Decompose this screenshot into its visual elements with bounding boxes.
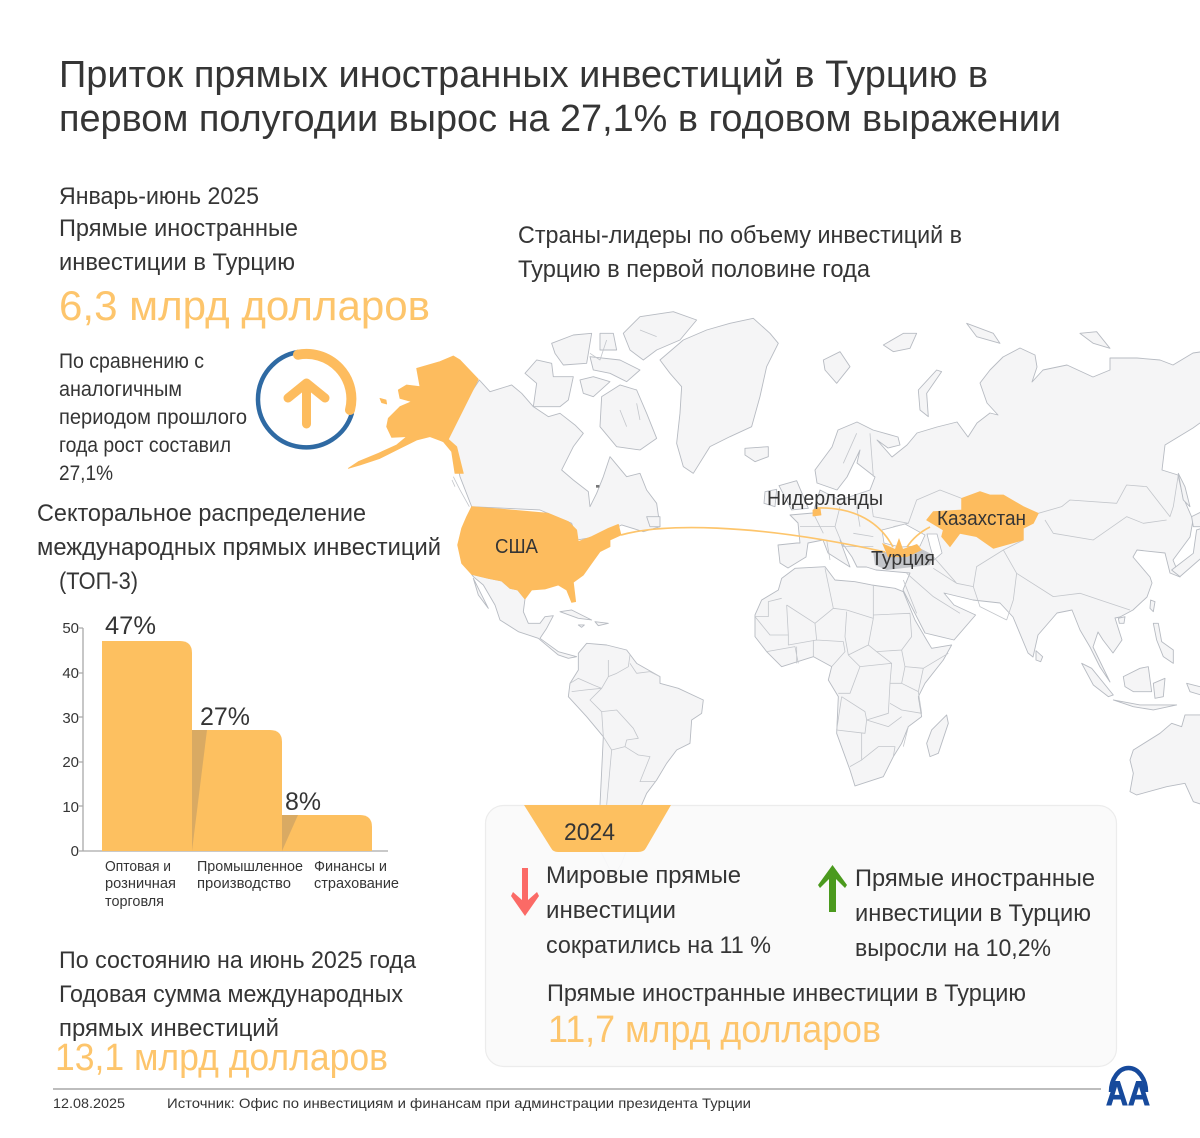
flow arrows into Turkey: [621, 508, 930, 557]
title: Приток прямых иностранных инвестиций в Турцию в: [59, 54, 988, 96]
bar chart: 30: [62, 710, 79, 727]
Mexico and Caribbean: [472, 574, 608, 658]
comparison text: периодом прошлого: [59, 406, 247, 429]
Netherlands highlighted: [813, 508, 821, 516]
category labels: Финансы и: [314, 858, 387, 875]
period and FDI heading: [59, 183, 298, 276]
bar shadow 2: [192, 730, 207, 851]
category labels: торговля: [105, 893, 164, 910]
Islands of Arctic and East Asia: [764, 323, 1200, 577]
category labels: производство: [197, 875, 291, 892]
Africa: [755, 567, 952, 786]
Southeast Asia and Australia: [1036, 600, 1200, 808]
footer: 12.08.2025: [53, 1095, 125, 1111]
category labels: розничная: [105, 875, 176, 892]
icon: AA logo: AA: [1106, 1075, 1150, 1113]
June 2025 block: прямых инвестиций: [59, 1015, 279, 1042]
Alaska highlighted: [348, 356, 478, 473]
North America and Greenland: [440, 312, 778, 540]
bar: finance 8%: [282, 815, 372, 851]
value labels: [105, 612, 321, 816]
text: FDI to Turkey growth: Прямые иностранные: [855, 865, 1095, 892]
Turkey highlighted: [873, 548, 933, 570]
map labels: Нидерланды: [767, 488, 883, 510]
panel: 2024: [486, 805, 1116, 1066]
text: FDI to Turkey growth: инвестиции в Турцию: [855, 900, 1091, 927]
footer: Источник: Офис по инвестициям и финансам при админстрации президента Турции: [167, 1095, 751, 1111]
bar chart: 10: [62, 799, 79, 816]
period and FDI heading: инвестиции в Турцию: [59, 249, 295, 276]
tab: 2024: [524, 805, 671, 852]
title: первом полугодии вырос на 27,1% в годовом выражении: [59, 98, 1061, 140]
icon: growth ring with up arrow: [258, 352, 352, 447]
June 2025 block: [55, 947, 417, 1079]
arrowheads at Turkey: [882, 538, 922, 557]
map heading: [518, 222, 962, 283]
text: 2024 value: 11,7 млрд долларов: [548, 1009, 881, 1051]
footer: [53, 1088, 1101, 1111]
text: world FDI: [546, 862, 771, 959]
text: FDI to Turkey growth: выросли на 10,2%: [855, 935, 1051, 962]
sector heading: международных прямых инвестиций: [37, 534, 441, 561]
June 2025 block: 13,1 млрд долларов: [55, 1037, 388, 1079]
bar: trade 47%: [102, 641, 192, 851]
arrow: USA to Turkey: [621, 528, 885, 552]
comparison text: 27,1%: [59, 462, 113, 485]
category labels: страхование: [314, 875, 399, 892]
bar chart: 50: [62, 620, 79, 637]
Eurasia seas: [882, 524, 942, 560]
arrow: Netherlands to Turkey: [817, 508, 893, 547]
June 2025 block: Годовая сумма международных: [59, 981, 403, 1008]
bar: manufacturing 27%: [192, 730, 282, 851]
text: 2024 value: [547, 980, 1026, 1051]
comparison text: года рост составил: [59, 434, 231, 457]
Kazakhstan highlighted: [927, 492, 1038, 548]
icon: red down arrow: [511, 868, 539, 916]
map labels: Казахстан: [937, 508, 1026, 530]
map labels: [495, 488, 1026, 570]
Eurasia: [778, 348, 1200, 682]
title: [59, 54, 1061, 140]
map labels: Турция: [871, 548, 935, 570]
Asian and European borders: [800, 433, 1178, 620]
bar chart: 40: [62, 665, 79, 682]
category labels: Промышленное: [197, 858, 303, 875]
comparison text: По сравнению с: [59, 350, 204, 373]
icon: green up arrow: [818, 865, 847, 912]
period and FDI heading: Прямые иностранные: [59, 215, 298, 242]
headline value: 6,3 млрд долларов: [59, 282, 430, 329]
value labels: 8%: [285, 788, 321, 816]
June 2025 block: По состоянию на июнь 2025 года: [59, 947, 417, 974]
text: world FDI: инвестиции: [546, 897, 676, 924]
bar chart: 20: [62, 754, 79, 771]
world map: [440, 312, 1200, 877]
value labels: 47%: [105, 612, 156, 640]
text: world FDI: Мировые прямые: [546, 862, 741, 889]
value labels: 27%: [200, 703, 250, 731]
text: FDI to Turkey growth: [855, 865, 1095, 962]
comparison text: [59, 350, 247, 485]
category labels: [105, 858, 399, 910]
map heading: Турцию в первой половине года: [518, 256, 871, 283]
sector heading: (ТОП-3): [59, 568, 138, 595]
map heading: Страны-лидеры по объему инвестиций в: [518, 222, 962, 249]
map labels: США: [495, 536, 539, 558]
category labels: Оптовая и: [105, 858, 171, 875]
sector heading: [37, 500, 441, 595]
USA highlighted: [458, 507, 621, 602]
bar shadow 3: [282, 815, 298, 851]
text: 2024 value: Прямые иностранные инвестиции в Турцию: [547, 980, 1026, 1007]
arrow: Kazakhstan to Turkey: [907, 527, 930, 547]
South America: [568, 643, 703, 877]
sector heading: Секторальное распределение: [37, 500, 366, 527]
comparison text: аналогичным: [59, 378, 182, 401]
text: world FDI: сократились на 11 %: [546, 932, 771, 959]
bar chart: 0: [71, 843, 79, 860]
tab: 2024: 2024: [564, 819, 615, 846]
period and FDI heading: Январь-июнь 2025: [59, 183, 259, 210]
bar chart: [62, 612, 399, 910]
